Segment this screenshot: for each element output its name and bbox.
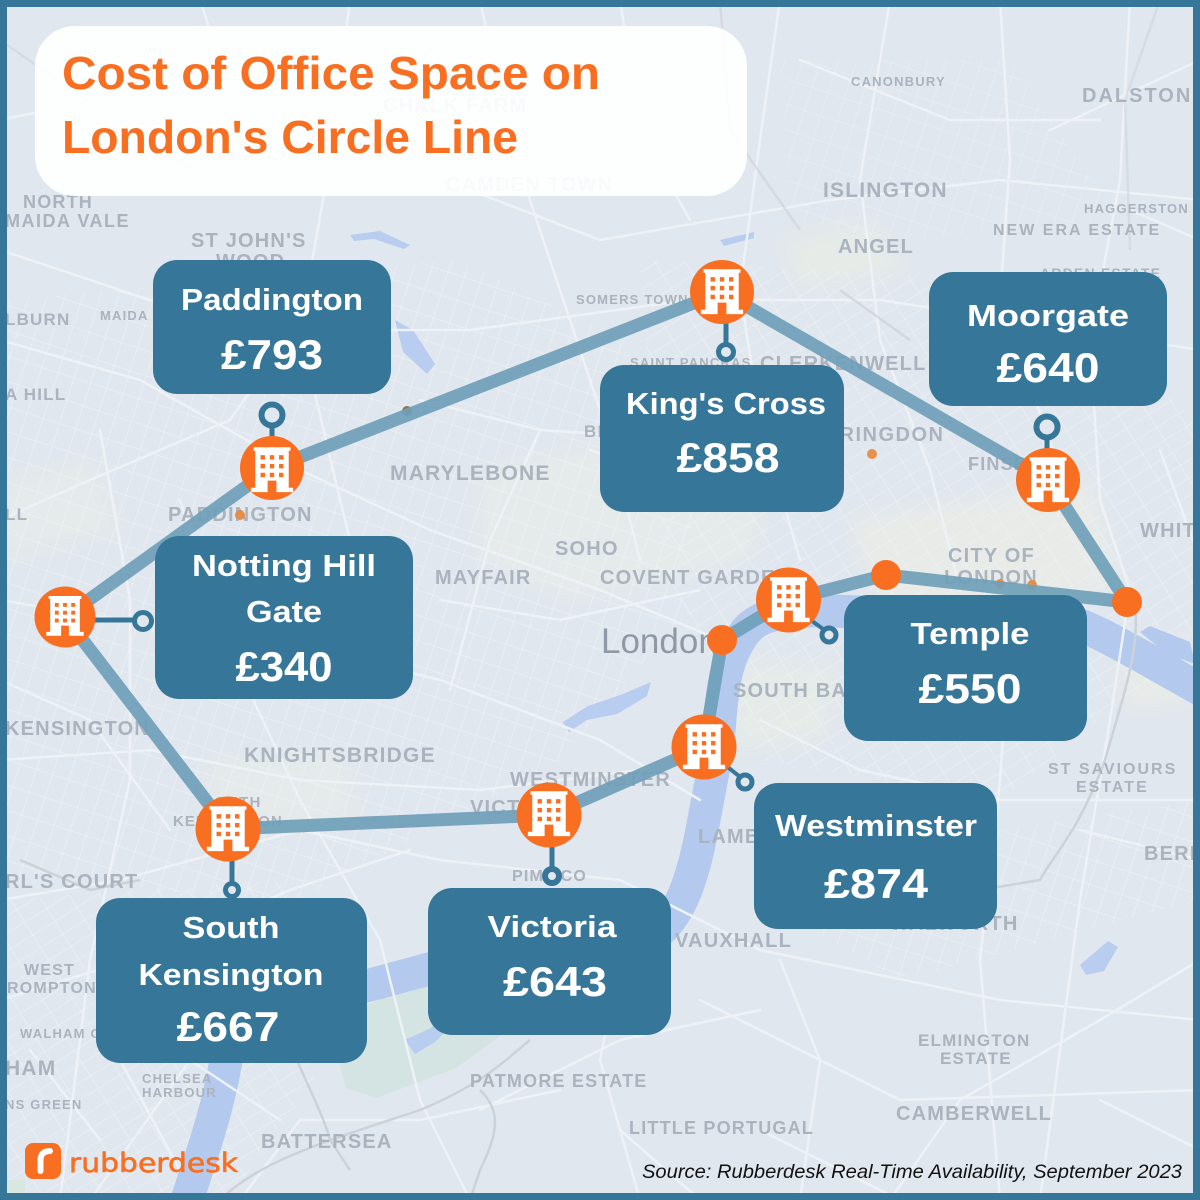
- station dot: [1112, 587, 1142, 617]
- map: place labels: CHELSEA: [142, 1071, 213, 1086]
- map: place labels: SOUTH BANK: [733, 680, 878, 702]
- map: place labels: MAIDA VALE: [5, 211, 130, 231]
- card: South Kensington: [96, 898, 367, 1063]
- map: place labels: BLOOMSBURY: [584, 422, 718, 441]
- map: place labels: CLERKENWELL: [760, 353, 927, 375]
- card: Moorgate: [929, 272, 1167, 406]
- station dot: [871, 560, 901, 590]
- map: place labels: PIMLICO: [512, 868, 587, 885]
- card: King's Cross: £858: [676, 434, 780, 481]
- map: place labels: KNIGHTSBRIDGE: [244, 744, 436, 767]
- map: place labels: ANGEL: [838, 236, 914, 258]
- map: place labels: DALSTON: [1082, 85, 1192, 107]
- card: King's Cross: [600, 365, 844, 512]
- map: place labels: WOOD: [216, 251, 285, 273]
- card: Moorgate: Moorgate: [967, 298, 1129, 333]
- map: orange location pins: [235, 406, 1037, 590]
- map: place labels: MAYFAIR: [435, 567, 532, 589]
- map: city building tint patches: [0, 220, 1190, 830]
- icon: Temple building: [756, 568, 821, 632]
- map: place labels: PADDINGTON: [168, 504, 313, 526]
- map: place labels: NORTH: [23, 192, 93, 212]
- map: place labels: ELMINGTON: [918, 1031, 1030, 1050]
- icon: Notting Hill Gate building: [34, 586, 96, 648]
- card: Westminster: £874: [824, 860, 929, 907]
- map: place labels: WHIT: [1140, 520, 1196, 542]
- card: Temple: [844, 595, 1087, 741]
- map: place labels: CHALK FARM: [383, 95, 527, 117]
- map: place labels: LL: [5, 505, 28, 524]
- map: place labels: RL'S COURT: [5, 871, 138, 893]
- map: place labels: ST JOHN'S: [191, 230, 307, 252]
- card: South Kensington: £667: [176, 1003, 280, 1050]
- card: South Kensington: South: [182, 910, 280, 945]
- card: Paddington: Paddington: [181, 282, 363, 317]
- map: place labels: ROMPTON: [7, 980, 97, 997]
- logo: rubberdesk: [25, 1143, 238, 1179]
- map: place labels: PATMORE ESTATE: [470, 1071, 647, 1091]
- connector: Westminster: [725, 765, 752, 789]
- map: docks: [1140, 626, 1195, 664]
- title line two: London's Circle Line: [62, 111, 518, 163]
- map: place labels: HAM: [5, 1057, 56, 1080]
- map: place labels: SOMERS TOWN: [576, 292, 689, 307]
- card: Victoria: £643: [503, 958, 607, 1005]
- map: place labels: LAMBETH: [698, 826, 804, 848]
- card: Moorgate: £640: [996, 344, 1100, 391]
- map: place labels: ST SAVIOURS: [1048, 761, 1177, 778]
- map: place labels: HAGGERSTON: [1084, 201, 1189, 216]
- map: lakes and canals: [350, 231, 1118, 1054]
- card: Temple: Temple: [910, 616, 1030, 651]
- connector: Notting Hill Gate: [90, 612, 152, 630]
- map: place labels: WEST: [24, 962, 75, 979]
- card: Victoria: [428, 888, 671, 1035]
- map: place labels: ARDEN ESTATE: [1040, 265, 1161, 281]
- map: place labels: CAMBERWELL: [896, 1103, 1052, 1125]
- map: place labels: COVENT GARDEN: [600, 567, 791, 589]
- station dot: [707, 625, 737, 655]
- card: Paddington: £793: [221, 331, 323, 378]
- title panel: [35, 26, 747, 196]
- map: place labels: WESTMINSTER: [510, 769, 671, 791]
- card: Notting Hill Gate: [155, 536, 413, 699]
- card: Temple: £550: [918, 665, 1022, 712]
- map: place labels: NS GREEN: [5, 1097, 83, 1112]
- connector: Paddington: [262, 404, 282, 445]
- card: Victoria: Victoria: [488, 909, 617, 944]
- map: place labels: FARRINGDON: [795, 424, 944, 446]
- map: place labels: LONDON: [944, 567, 1038, 589]
- map: place labels: CAMDEN TOWN: [446, 174, 613, 196]
- card: Westminster: Westminster: [775, 808, 977, 843]
- map: place labels: VAUXHALL: [675, 930, 792, 952]
- connector: South Kensington: [226, 855, 238, 896]
- map: place labels: ESTATE: [1076, 779, 1149, 796]
- icon: King's Cross building: [690, 260, 754, 324]
- map: place labels: CITY OF: [948, 545, 1035, 567]
- title line one: Cost of Office Space on: [62, 47, 600, 99]
- map: place labels: ISLINGTON: [823, 179, 948, 202]
- circle line route: [65, 292, 1127, 829]
- connector: Moorgate: [1036, 416, 1058, 455]
- card: Notting Hill Gate: Gate: [246, 594, 322, 629]
- card: Notting Hill Gate: £340: [236, 643, 332, 690]
- card: Paddington: [153, 260, 391, 394]
- map: place labels: MAIDA: [100, 308, 149, 323]
- card: King's Cross: King's Cross: [626, 386, 826, 421]
- map: place labels: KENSINGTON: [173, 813, 283, 830]
- map: place labels: LBURN: [5, 310, 70, 329]
- map: place labels: SOUTH: [203, 794, 262, 811]
- map: place labels: BATTERSEA: [261, 1131, 393, 1153]
- card: Westminster: [754, 783, 997, 929]
- map: place labels: SOHO: [555, 538, 619, 560]
- connector: Victoria: [545, 840, 559, 883]
- map: battersea park: [340, 962, 506, 1098]
- map: place labels: KENSINGTON: [5, 718, 150, 740]
- icon: Moorgate building: [1016, 448, 1080, 512]
- map: place labels: London: [601, 622, 718, 661]
- card: South Kensington: Kensington: [138, 957, 324, 992]
- map: place labels: SAINT PANCRAS: [630, 355, 752, 370]
- map: place labels: NEW ERA ESTATE: [993, 222, 1161, 239]
- source note: Source: Rubberdesk Real-Time Availability, September 2023: [642, 1162, 1182, 1183]
- map: place labels: VICTORIA: [470, 797, 575, 819]
- logo: rubberdesk: rubberdesk: [69, 1148, 238, 1179]
- map: place labels: MARYLEBONE: [390, 462, 551, 485]
- card: Notting Hill Gate: Notting Hill: [192, 548, 376, 583]
- map: place labels: WALWORTH: [890, 913, 1018, 935]
- icon: Victoria building: [516, 782, 582, 848]
- map: place labels: FINSBURY: [968, 454, 1069, 474]
- icon: Westminster building: [672, 714, 736, 780]
- icon: South Kensington building: [196, 796, 260, 862]
- connector: Temple: [808, 618, 836, 642]
- map: place labels: HARBOUR: [142, 1085, 217, 1100]
- map: place labels: ESTATE: [940, 1049, 1012, 1068]
- map: river thames: [185, 611, 1200, 1200]
- connector: King's Cross: [718, 320, 734, 360]
- map: place labels: A HILL: [5, 385, 66, 404]
- icon: Paddington building: [240, 436, 304, 500]
- map: place labels: LITTLE PORTUGAL: [629, 1118, 814, 1138]
- map: place labels: WALHAM GREEN: [20, 1026, 143, 1041]
- map: place labels: CANONBURY: [851, 74, 946, 89]
